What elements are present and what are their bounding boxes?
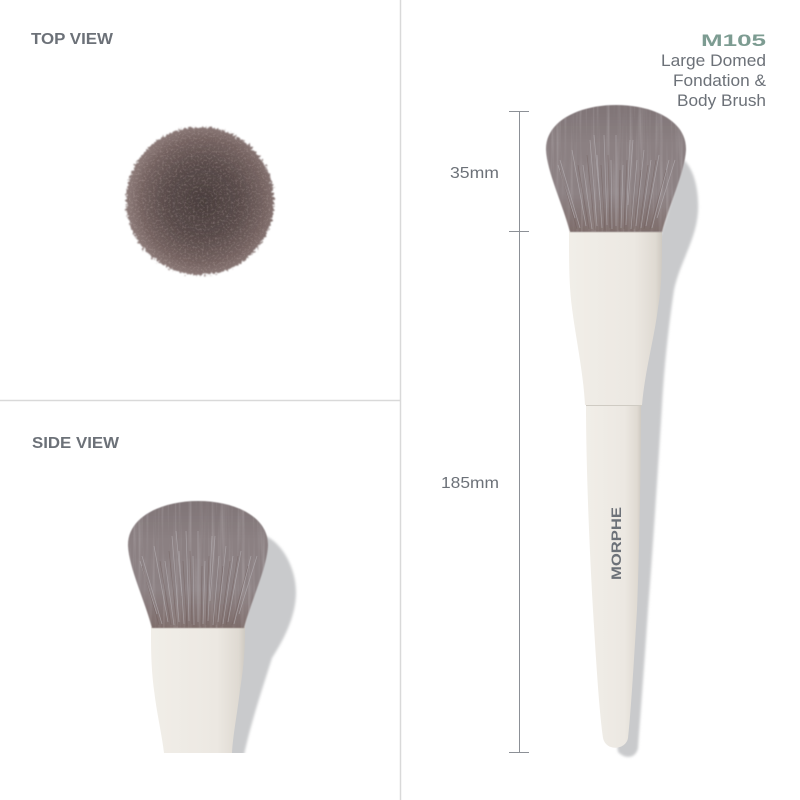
- dimension scale: [509, 111, 529, 753]
- product name: Fondation &: [673, 72, 766, 90]
- side view ferrule: [151, 627, 245, 753]
- panel divider lines: [0, 0, 400, 800]
- side view bristles: [128, 501, 268, 628]
- product name: Body Brush: [677, 92, 766, 110]
- product name: Large Domed: [661, 52, 766, 70]
- heading: side view: SIDE VIEW: [32, 435, 119, 452]
- full brush cast shadow: [600, 160, 698, 757]
- label: 35mm: 35mm: [450, 165, 499, 182]
- side view brush: [128, 501, 296, 760]
- product name: [661, 52, 766, 110]
- full brush: [546, 105, 698, 757]
- side view cast shadow: [232, 536, 298, 753]
- top view brush bristles: [126, 127, 274, 275]
- ferrule: [569, 232, 662, 405]
- ferrule seam: [586, 404, 642, 406]
- handle: [586, 405, 641, 748]
- heading: top view: TOP VIEW: [31, 31, 113, 48]
- product title block: [661, 31, 766, 110]
- label: 185mm: 185mm: [441, 475, 499, 492]
- bristles: [546, 105, 686, 232]
- brand mark: MORPHE: [608, 507, 624, 580]
- product code: M105: [701, 31, 766, 50]
